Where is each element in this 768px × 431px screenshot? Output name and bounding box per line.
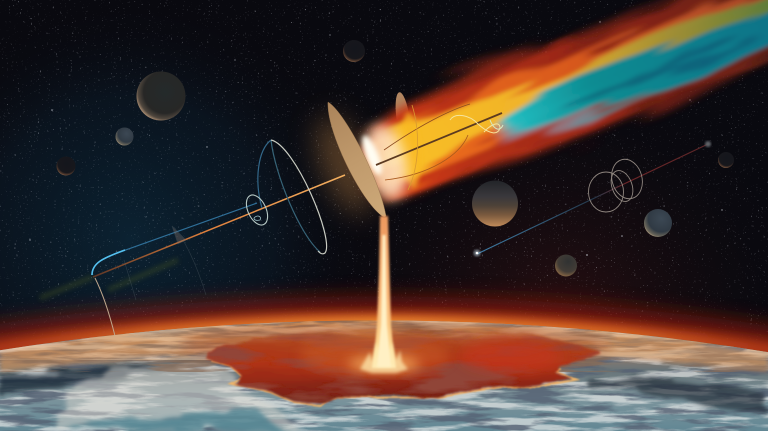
planet: small left upper [116,128,134,146]
jet splash spikes [360,342,408,373]
crater molten basin [205,332,600,403]
planet surface with clouds [0,320,768,431]
orange crater centre glow [300,335,450,375]
rear disc [393,91,413,145]
main reflector disc [328,102,386,217]
planet: large upper-left [136,72,186,120]
big orbit ring [258,140,327,254]
blue curved trace [92,203,257,275]
white descending trace [95,278,115,336]
plume haze [285,0,768,355]
planet: small far right [718,152,734,168]
planet: small lower centre [555,254,577,276]
rods and filaments in plume [376,104,503,190]
plume colour bands [291,0,768,348]
energy jet column [372,216,396,368]
rainbow beam plume [285,0,768,355]
planet: banded right of beam [472,180,518,226]
right trace line [477,144,708,254]
faded olive beam [40,260,178,298]
bright red crater flank [460,340,560,372]
jet core [377,235,391,367]
impact flash glow [305,109,413,221]
planet: top centre [343,40,365,62]
yellow lens inside plume [399,111,423,189]
atmosphere glow on horizon [0,321,768,356]
orange rod [93,175,345,277]
jet glow [348,215,420,372]
small orbit ring [242,192,272,228]
crater heat halo [180,325,610,365]
faint probe marks [124,226,206,300]
right interlocking rings [588,156,647,212]
right trace endpoints [474,141,711,256]
planet: small far left [56,156,76,176]
planet: blue-grey right [644,209,672,237]
crater rim highlight [211,360,577,405]
